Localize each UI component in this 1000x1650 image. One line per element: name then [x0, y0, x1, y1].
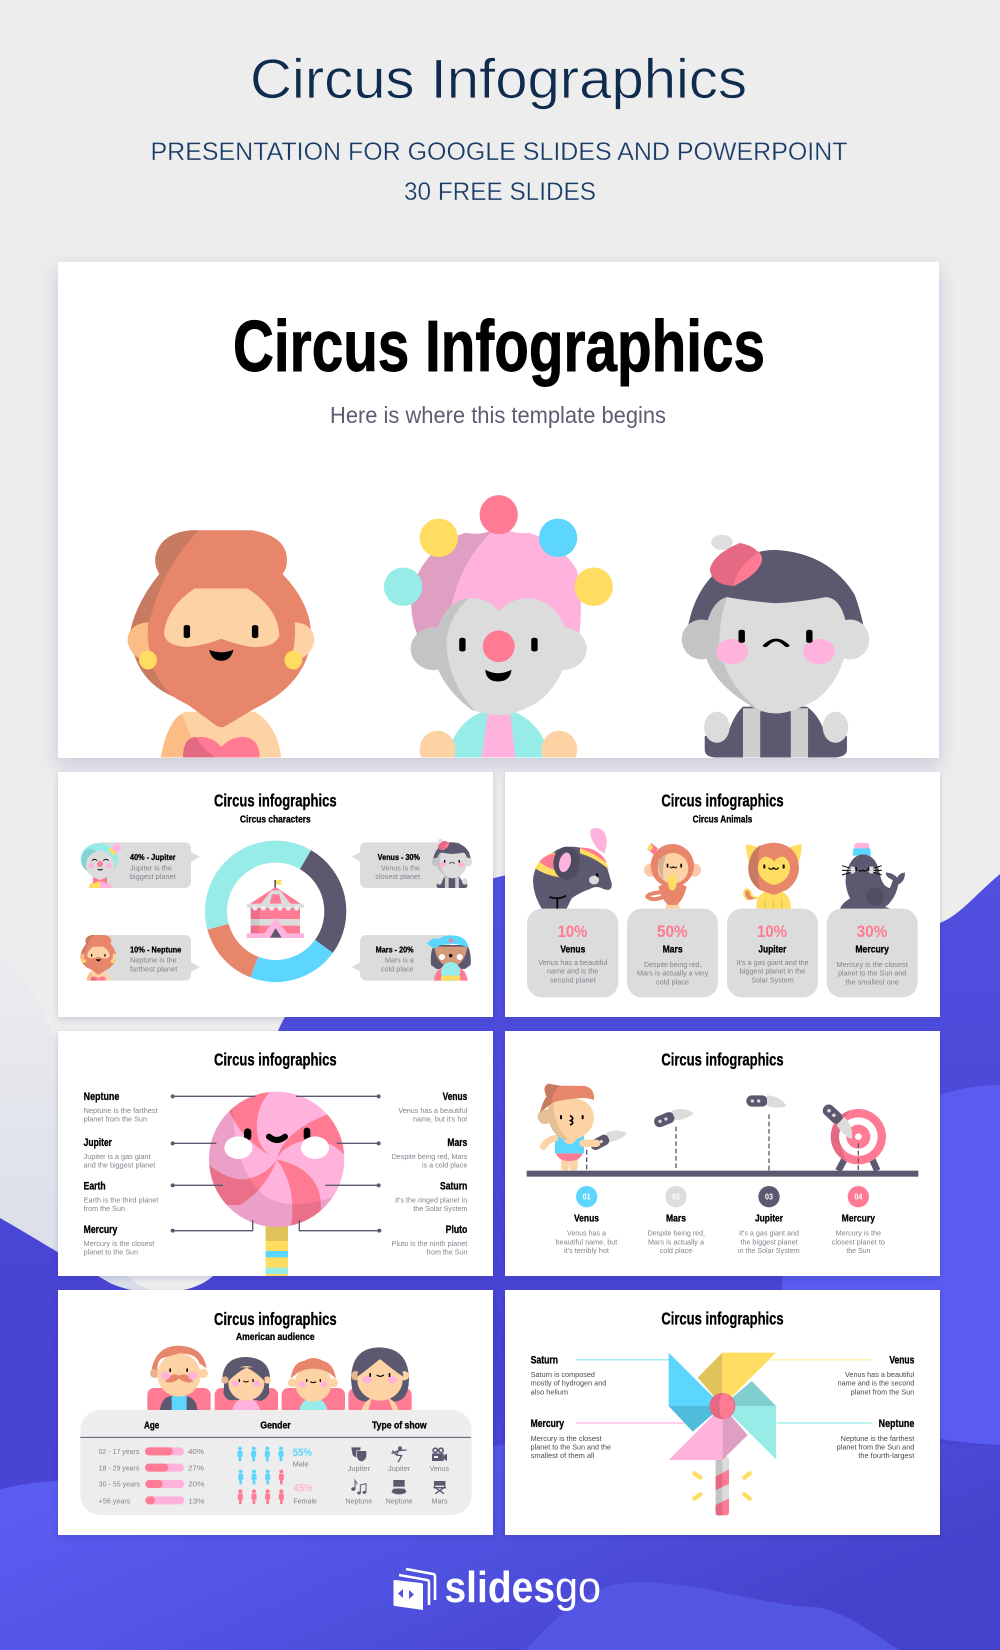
audience man [150, 1346, 208, 1410]
hero characters [128, 495, 869, 769]
callout: Jupiter: Jupiter is the [130, 865, 172, 872]
step 3: 03 [765, 1193, 773, 1202]
audience woman [351, 1347, 409, 1410]
card: Mars: cold place [656, 979, 689, 986]
age bars: 40% [188, 1447, 204, 1456]
heading: Circus infographics [214, 1050, 337, 1070]
icon: lion [744, 843, 802, 909]
clown portrait [81, 843, 122, 888]
text: Venus [838, 1354, 915, 1396]
logo: slidesgo: slides [444, 1563, 555, 1612]
text: Mars [392, 1137, 468, 1170]
text: Mercury: Mercury is the closest [531, 1436, 602, 1443]
card: Mercury: 30% [857, 922, 887, 941]
card: Venus [527, 909, 618, 997]
panel: hero slide [58, 262, 939, 769]
audience girl [221, 1357, 271, 1410]
text: Mercury: Mercury [84, 1224, 117, 1236]
subheading: Circus Animals [693, 814, 753, 825]
heading: Circus infographics [214, 1309, 337, 1329]
card: Mars [627, 909, 718, 997]
text: Mercury: Mercury is the closest [84, 1241, 154, 1248]
show type icons: Jupiter [348, 1466, 371, 1473]
card: Mars: Despite being red, [644, 962, 701, 969]
panel: American audience [58, 1290, 493, 1535]
text: Earth [84, 1180, 158, 1213]
text: Jupiter: Jupiter [84, 1137, 112, 1149]
card: Venus: Venus [560, 944, 586, 955]
text: Mars: Despite being red, Mars [392, 1154, 468, 1161]
step 1: 01 [583, 1193, 591, 1202]
step 4: 04 [854, 1193, 863, 1202]
step 1: Venus [574, 1214, 599, 1225]
step 4: closest planet to [832, 1239, 885, 1246]
text: Jupiter: Jupiter is a gas giant [84, 1154, 151, 1161]
icon: music notes [351, 1480, 366, 1494]
callout: Jupiter: 40% - Jupiter [130, 852, 176, 862]
callout: Neptune [80, 935, 200, 981]
show type icons: Neptune [345, 1498, 372, 1505]
card: Venus: 10% [558, 922, 587, 941]
panel: circus characters [58, 772, 493, 1017]
donut chart [216, 852, 335, 971]
pinwheel stick [716, 1457, 729, 1515]
heading: Circus infographics [661, 1050, 784, 1070]
text: Mars: Mars [447, 1137, 467, 1149]
icon: stacked slides [394, 1569, 435, 1610]
text: Mercury: planet to the Sun [84, 1250, 138, 1257]
age bars [99, 1447, 205, 1505]
text: Saturn: the Solar System [413, 1206, 468, 1213]
step 3: Jupiter [755, 1214, 783, 1225]
logo: slidesgo [394, 1563, 601, 1612]
text: Neptune: Neptune [879, 1418, 914, 1430]
gender pictogram: 45% [293, 1483, 313, 1495]
icon: elephant [533, 828, 612, 909]
card: Mercury: Mercury is the closest [837, 962, 908, 969]
age bars: 30 - 55 years [99, 1482, 141, 1489]
icon: knife thrower boy [538, 1084, 597, 1171]
step 3: It's a gas giant and [739, 1231, 799, 1238]
text: Saturn: mostly of hydrogen and [531, 1381, 606, 1388]
character: mime [682, 535, 869, 758]
gender pictogram: Male [293, 1462, 309, 1469]
step 2 [648, 1186, 705, 1255]
text: Venus: Venus [889, 1354, 914, 1366]
leader lines [171, 1094, 381, 1233]
card: Jupiter: Solar System [751, 977, 794, 984]
text: Venus: name, but it's hot [413, 1117, 467, 1124]
column heading: Type of show: Type of show [372, 1420, 427, 1431]
column heading: Age: Age [144, 1420, 160, 1431]
lollipop stick [266, 1225, 288, 1276]
text: Neptune: Neptune is the farthest [84, 1108, 158, 1115]
age bars: 27% [188, 1463, 204, 1472]
text: Pluto: Pluto is the ninth planet [392, 1241, 467, 1248]
character: clown [384, 495, 613, 769]
step 1 [556, 1186, 617, 1255]
step 1: Venus has a [567, 1231, 606, 1238]
age bars: 13% [188, 1496, 205, 1505]
text: Jupiter: and the biggest planet [84, 1163, 155, 1170]
text: Mercury: planet to the Sun and the [531, 1445, 611, 1452]
card: Mercury: planet to the Sun and [838, 971, 906, 978]
card: Mercury: Mercury [855, 944, 889, 955]
callout: Venus: Venus is the [381, 865, 420, 872]
callout: Mars: cold place [381, 966, 414, 973]
callout: Venus: Venus - 30% [378, 852, 420, 862]
callout: Neptune: Neptune is the [130, 958, 177, 965]
logo: slidesgo: go [555, 1563, 601, 1612]
text: Neptune [84, 1091, 158, 1124]
panel: circus animals [505, 772, 940, 1017]
text: Earth: Earth is the third planet [84, 1197, 158, 1204]
callout: Jupiter [81, 842, 200, 888]
step 3 [738, 1186, 800, 1255]
text: Pluto: Pluto [446, 1224, 468, 1236]
icon: theatre masks [351, 1447, 367, 1462]
icon: flying knife 2 [652, 1103, 694, 1130]
sparkle ticks [694, 1473, 750, 1499]
audience characters [147, 1346, 412, 1415]
text: Saturn: Saturn [531, 1354, 558, 1366]
card: Mercury: the smallest one [845, 979, 899, 986]
icon: target [831, 1109, 886, 1171]
subheading: American audience [236, 1332, 315, 1343]
subtitle: PRESENTATION FOR GOOGLE SLIDES AND POWERPOINT [150, 138, 848, 166]
icon: movie camera [432, 1447, 447, 1461]
text: Pluto [392, 1224, 468, 1257]
panel: lollipop infographic [58, 1031, 493, 1276]
panel: knife thrower timeline [505, 1031, 940, 1276]
text: Neptune: Neptune [84, 1091, 119, 1103]
text: Saturn [395, 1180, 468, 1213]
text: Neptune: Neptune is the farthest [841, 1436, 914, 1443]
icon: knife stuck in target [820, 1102, 859, 1140]
text: Neptune: planet from the Sun [84, 1117, 147, 1124]
step 4: Mercury is the [836, 1231, 881, 1238]
callout: Mars: Mars is a [385, 958, 414, 965]
text: Saturn [531, 1354, 606, 1396]
card: Mars: Mars is actually a very [637, 971, 709, 978]
callout: Mars [352, 935, 471, 981]
callout: Neptune: farthest planet [130, 966, 177, 973]
text: Mercury: smallest of them all [531, 1453, 595, 1460]
step 2: Mars is actually a [648, 1239, 704, 1246]
text: Pluto: from the Sun [427, 1250, 467, 1257]
age bars: +56 years [99, 1498, 131, 1505]
step 4 [832, 1186, 885, 1255]
icon: circus tent [247, 880, 304, 938]
subtitle [150, 138, 848, 206]
show type icons: Neptune [386, 1498, 413, 1505]
card: Venus: second planet [550, 977, 596, 984]
step 4: Mercury [842, 1214, 875, 1225]
icon: knife in hand [588, 1124, 628, 1153]
show type icons [345, 1447, 449, 1505]
column heading: Gender: Gender [260, 1420, 291, 1431]
card: Venus: name and is the [547, 969, 598, 976]
callout: Jupiter: biggest planet [130, 874, 176, 881]
age bars: 18 - 29 years [99, 1465, 140, 1472]
bearded portrait [80, 935, 117, 981]
text: Earth: Earth [84, 1180, 106, 1192]
text: Saturn: also helium [531, 1389, 568, 1396]
step 1: it's terribly hot [564, 1248, 609, 1255]
callout: Neptune: 10% - Neptune [130, 944, 181, 954]
age bars: 20% [188, 1480, 205, 1489]
text: Mars: is a cold place [422, 1163, 467, 1170]
title: Circus Infographics [250, 47, 747, 110]
lollipop candy [209, 1092, 344, 1227]
panel: pinwheel infographic [505, 1290, 940, 1535]
callout: Venus: closest planet [375, 874, 420, 881]
step 3: the biggest planet [740, 1239, 798, 1246]
dashed guides [587, 1114, 858, 1171]
icon: top hat [392, 1480, 406, 1494]
callout: Venus [352, 839, 472, 888]
step 1: beautiful name, but [556, 1239, 617, 1246]
card: Jupiter: Jupiter [758, 944, 786, 955]
text: Venus: Venus has a beautiful [845, 1372, 915, 1379]
text: Earth: from the Sun [84, 1206, 125, 1213]
text: Venus: Venus [443, 1091, 467, 1103]
text: Venus: Venus has a beautiful [398, 1108, 468, 1115]
gender pictogram: Female [293, 1498, 317, 1505]
heading: Circus infographics [661, 1308, 784, 1328]
heading: Circus infographics [214, 791, 337, 811]
step 2: Mars [666, 1214, 686, 1225]
pinwheel blades [669, 1353, 776, 1460]
text: Saturn: Saturn is composed [531, 1372, 595, 1379]
icon: flying knife 3 [746, 1095, 787, 1108]
card: Mercury [827, 909, 918, 997]
step 2: Despite being red, [648, 1231, 705, 1238]
audience boy [288, 1358, 338, 1410]
icon: seal [840, 843, 905, 909]
character: bearded woman [128, 530, 314, 758]
text: Venus: planet from the Sun [851, 1389, 914, 1396]
step 2: cold place [660, 1248, 692, 1255]
text: Venus: name and is the second [838, 1381, 914, 1388]
ground line [527, 1171, 918, 1177]
text: Neptune: the fourth-largest [858, 1453, 914, 1460]
card: Jupiter [727, 909, 818, 997]
fortune teller portrait [427, 935, 471, 981]
icon: monkey [644, 843, 701, 909]
text: Mercury [531, 1418, 611, 1460]
gender pictogram [237, 1447, 317, 1505]
mime portrait [432, 839, 472, 888]
card: Mars: 50% [657, 922, 688, 941]
icon: acrobat [392, 1447, 406, 1462]
show type icons: Jupiter [388, 1466, 411, 1473]
show type icons: Venus [430, 1466, 449, 1473]
text: Venus [398, 1091, 468, 1124]
heading: Circus infographics [661, 791, 784, 811]
age bars: 02 - 17 years [99, 1449, 140, 1456]
text: Neptune: planet from the Sun and [837, 1445, 914, 1452]
text: Saturn: Saturn [440, 1180, 467, 1192]
text: Mercury [84, 1224, 154, 1257]
step 4: the Sun [846, 1248, 870, 1255]
text: Mercury: Mercury [531, 1418, 564, 1430]
text: Jupiter [84, 1137, 155, 1170]
gender pictogram: 55% [293, 1447, 312, 1459]
show type icons: Mars [432, 1498, 448, 1505]
card: Jupiter: biggest planet in the [740, 969, 805, 976]
card: Mars: Mars [663, 944, 683, 955]
card: Jupiter: 10% [757, 922, 787, 941]
stats panel [80, 1410, 472, 1515]
card: Jupiter: It's a gas giant and the [737, 960, 809, 967]
icon: director chair [433, 1482, 446, 1494]
hero subheading: Here is where this template begins [330, 402, 666, 428]
step 3: in the Solar System [738, 1248, 800, 1255]
callout: Mars: Mars - 20% [376, 944, 414, 954]
hero heading: Circus Infographics [233, 307, 765, 387]
text: Neptune [837, 1418, 914, 1460]
step 2: 02 [672, 1193, 680, 1202]
subtitle: 30 FREE SLIDES [404, 178, 596, 206]
leader lines [576, 1360, 872, 1423]
card: Venus: Venus has a beautiful [538, 960, 608, 967]
text: Saturn: It's the ringed planet in [395, 1197, 467, 1204]
subheading: Circus characters [240, 814, 311, 825]
